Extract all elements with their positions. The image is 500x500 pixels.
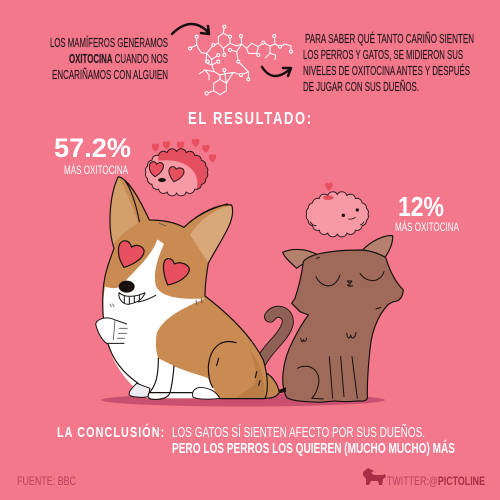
conclusion: [57, 423, 455, 457]
dog body: [103, 177, 267, 398]
illustration: cat: [260, 236, 403, 402]
stat: cat 12%: 12%: [398, 191, 444, 222]
icon: dog brain with heart eyes: [145, 139, 216, 196]
cat ears: [283, 236, 393, 268]
dog front leg: [148, 358, 174, 399]
dog nose: [119, 281, 135, 293]
stat: dog 57.2%: MÁS OXITOCINA: [64, 164, 128, 177]
dog tail: [265, 373, 279, 398]
arrow: from molecule: [262, 67, 291, 76]
heading: el resultado: EL RESULTADO:: [188, 109, 311, 129]
conclusion label: LA CONCLUSIÓN:: [57, 423, 164, 440]
arrow: to molecule: [172, 24, 209, 34]
floating hearts: [152, 139, 216, 162]
dog haunch and marks: [150, 342, 265, 399]
dog heart eyes: [118, 241, 189, 285]
cat details: [297, 257, 384, 399]
source: FUENTE: BBC: [17, 474, 76, 488]
stat: dog 57.2%: [54, 133, 131, 177]
dog back paw: [192, 387, 220, 399]
stat: dog 57.2%: 57.2%: [54, 133, 131, 163]
text block: intro left: OXITOCINA CUANDO NOS: [69, 52, 168, 66]
dog paw marks: [110, 223, 202, 340]
stat: cat 12%: [395, 191, 459, 234]
illustration: dog: [96, 177, 286, 399]
icon: oxytocin molecule: [188, 25, 292, 95]
text block: intro right: [303, 31, 474, 94]
text block: intro right: DE JUGAR CON SUS DUEÑOS.: [303, 80, 419, 94]
text block: intro left: ENCARIÑAMOS CON ALGUIEN: [52, 68, 168, 82]
credit: twitter pictoline: TWITTER:@PICTOLINE: [387, 474, 485, 488]
dog white chest and blaze: [103, 239, 220, 398]
dog ear inners: [111, 177, 232, 263]
dog outline: [103, 177, 267, 398]
text block: intro left: [50, 35, 168, 82]
icon: cat brain: [306, 182, 368, 237]
cat tail: [260, 312, 288, 363]
dog back left paw: [129, 383, 150, 397]
dog raised paw: [96, 318, 127, 343]
stat: cat 12%: MÁS OXITOCINA: [395, 221, 459, 234]
text block: intro left: LOS MAMÍFEROS GENERAMOS: [50, 35, 168, 50]
icon: pictoline animal: [363, 468, 386, 485]
dog haunch shade: [237, 350, 265, 398]
cat body: [283, 250, 403, 402]
ground shadow: [101, 394, 385, 406]
dog smile with teeth: [119, 293, 156, 304]
